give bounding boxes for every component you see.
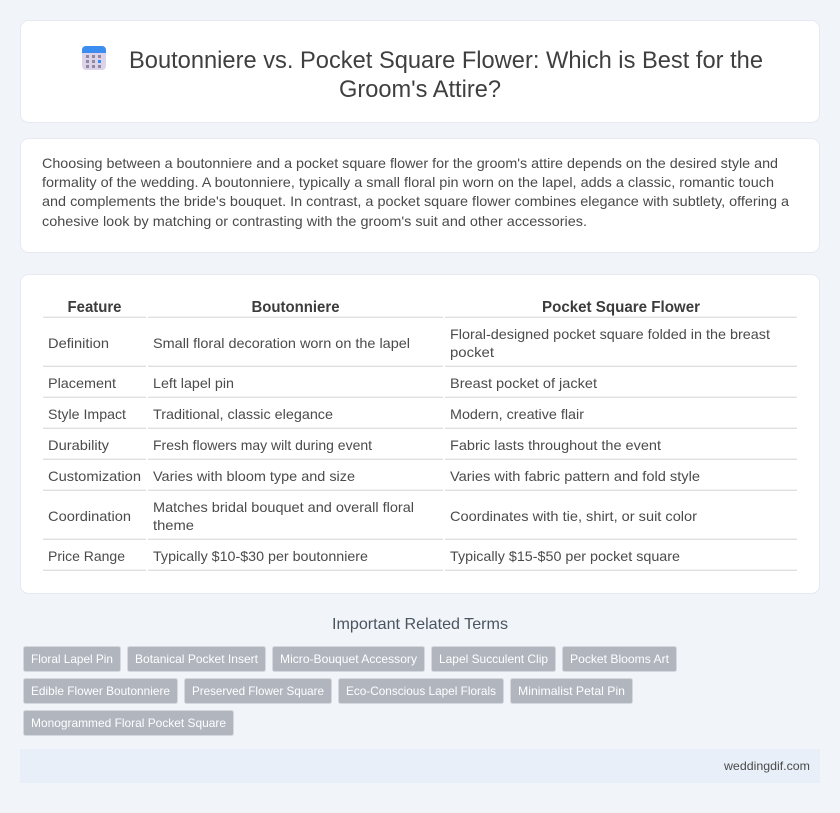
- title: Boutonniere vs. Pocket Square Flower: Which is Best for the: [129, 47, 763, 74]
- row: Durability: [48, 437, 661, 453]
- intro text: formality of the wedding. A boutonniere, typically a small floral pin worn on the lapel, adds a classic, romantic touch: [42, 174, 774, 190]
- related terms tags: Lapel Succulent Clip: [439, 652, 548, 666]
- related terms tags: Micro-Bouquet Accessory: [280, 652, 417, 666]
- row: Coordination: Coordinates with tie, shirt, or suit color: [450, 508, 697, 524]
- row: Durability: Fresh flowers may wilt during event: [153, 437, 372, 453]
- row: Durability: Durability: [48, 437, 109, 453]
- table header: Pocket Square Flower: [542, 299, 700, 316]
- heading: Important Related Terms: Important Related Terms: [332, 616, 508, 633]
- row: Price Range: Typically $15-$50 per pocket square: [450, 548, 680, 564]
- row: Coordination: Matches bridal bouquet and overall floral: [153, 499, 414, 515]
- row: Style Impact: Modern, creative flair: [450, 406, 584, 422]
- row: Customization: Varies with bloom type and size: [153, 468, 355, 484]
- panel: intro paragraph: [20, 138, 820, 252]
- footer bar: weddingdif.com: [723, 759, 810, 773]
- row: Price Range: [48, 548, 680, 564]
- table header: Feature: [68, 299, 122, 316]
- row: Customization: Varies with fabric pattern and fold style: [450, 468, 700, 484]
- intro text: and complements the bride's bouquet. In contrast, a pocket square flower combines elegance with subtlety, offering a: [42, 193, 789, 209]
- row: Definition: pocket: [450, 344, 494, 360]
- row: Price Range: Typically $10-$30 per boutonniere: [153, 548, 368, 564]
- row: Definition: Definition: [48, 335, 109, 351]
- row: Placement: Breast pocket of jacket: [450, 375, 597, 391]
- row: Style Impact: [48, 406, 584, 422]
- title: Groom's Attire?: [339, 76, 501, 103]
- panel: comparison table: [20, 274, 820, 594]
- row: Definition: Small floral decoration worn on the lapel: [153, 335, 410, 351]
- related terms tags: Preserved Flower Square: [192, 684, 324, 698]
- row: Style Impact: Style Impact: [48, 406, 126, 422]
- table header: [68, 299, 700, 316]
- row: Placement: Left lapel pin: [153, 375, 234, 391]
- row: Placement: [48, 375, 597, 391]
- intro text: Choosing between a boutonniere and a pocket square flower for the groom's attire depends on the desired style and: [42, 155, 778, 171]
- intro text: [42, 155, 789, 229]
- title: [129, 47, 763, 103]
- row: Customization: Customization: [48, 468, 141, 484]
- intro text: cohesive look by matching or contrasting with the groom's suit and other accessories.: [42, 213, 587, 229]
- related terms tags: Edible Flower Boutonniere: [31, 684, 170, 698]
- row: Price Range: Price Range: [48, 548, 125, 564]
- row: Coordination: [48, 499, 697, 533]
- related terms tags: Eco-Conscious Lapel Florals: [346, 684, 496, 698]
- related terms tags: Floral Lapel Pin: [31, 652, 113, 666]
- related terms tags: [24, 646, 676, 736]
- related terms tags: Botanical Pocket Insert: [135, 652, 259, 666]
- row: Durability: Fabric lasts throughout the event: [450, 437, 661, 453]
- row: Style Impact: Traditional, classic elegance: [153, 406, 333, 422]
- panel: title card: [20, 20, 820, 122]
- footer bar: [20, 749, 820, 783]
- row: Coordination: theme: [153, 517, 194, 533]
- related terms tags: Pocket Blooms Art: [570, 652, 670, 666]
- row: Definition: Floral-designed pocket square folded in the breast: [450, 326, 770, 342]
- row: Placement: Placement: [48, 375, 116, 391]
- row: Customization: [48, 468, 700, 484]
- row: Coordination: Coordination: [48, 508, 131, 524]
- related terms tags: Monogrammed Floral Pocket Square: [31, 716, 226, 730]
- related terms tags: Minimalist Petal Pin: [518, 684, 625, 698]
- icon: calendar: [82, 46, 106, 70]
- row: Definition: [48, 326, 770, 360]
- table header: Boutonniere: [252, 299, 340, 316]
